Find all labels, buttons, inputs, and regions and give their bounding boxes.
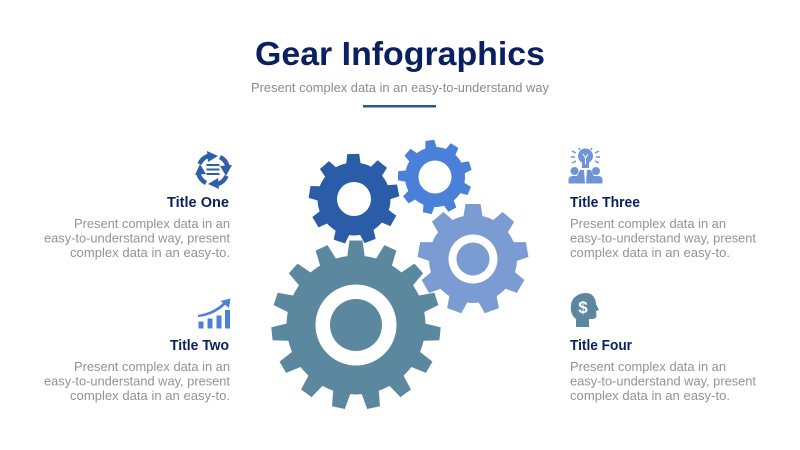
- icon: head with dollar sign: $: [578, 298, 588, 317]
- icon: head with dollar sign: [571, 293, 599, 327]
- icon: rising bar chart with arrow: [198, 298, 230, 328]
- gear: medium blue: [398, 139, 472, 215]
- text block: title four: [570, 360, 757, 403]
- text block: title four: easy-to-understand way, present: [570, 374, 757, 388]
- icon: light bulb and two people: [568, 148, 602, 184]
- gear: light periwinkle: [417, 204, 529, 314]
- text block: title two: easy-to-understand way, present: [44, 374, 231, 388]
- text block: title one: [44, 217, 231, 260]
- text block: title four: Present complex data in an: [570, 360, 726, 374]
- heading: title two: Title Two: [170, 338, 229, 354]
- heading: title three: Title Three: [570, 195, 640, 211]
- gear: large teal: [271, 240, 441, 410]
- subtitle: Present complex data in an easy-to-understand way: [251, 81, 550, 95]
- text block: title three: complex data in an easy-to.: [570, 246, 730, 260]
- title: Gear Infographics: [255, 35, 545, 72]
- text block: title one: easy-to-understand way, present: [44, 232, 231, 246]
- panel: title three: [568, 148, 757, 260]
- text block: title one: Present complex data in an: [74, 217, 230, 231]
- text block: title one: complex data in an easy-to.: [70, 246, 230, 260]
- panel: title four: [570, 293, 757, 403]
- text block: title two: complex data in an easy-to.: [70, 389, 230, 403]
- text block: title three: easy-to-understand way, present: [570, 232, 757, 246]
- text block: title two: Present complex data in an: [74, 360, 230, 374]
- panel: title two: [44, 298, 231, 403]
- text block: title four: complex data in an easy-to.: [570, 389, 730, 403]
- text block: title three: Present complex data in an: [570, 217, 726, 231]
- text block: title three: [570, 217, 757, 260]
- gear: dark blue: [308, 154, 400, 244]
- heading: title one: Title One: [167, 195, 229, 211]
- icon: circular arrows with list: [195, 151, 232, 189]
- title divider: [363, 105, 436, 108]
- panel: title one: [44, 151, 232, 260]
- text block: title two: [44, 360, 231, 403]
- heading: title four: Title Four: [570, 338, 632, 354]
